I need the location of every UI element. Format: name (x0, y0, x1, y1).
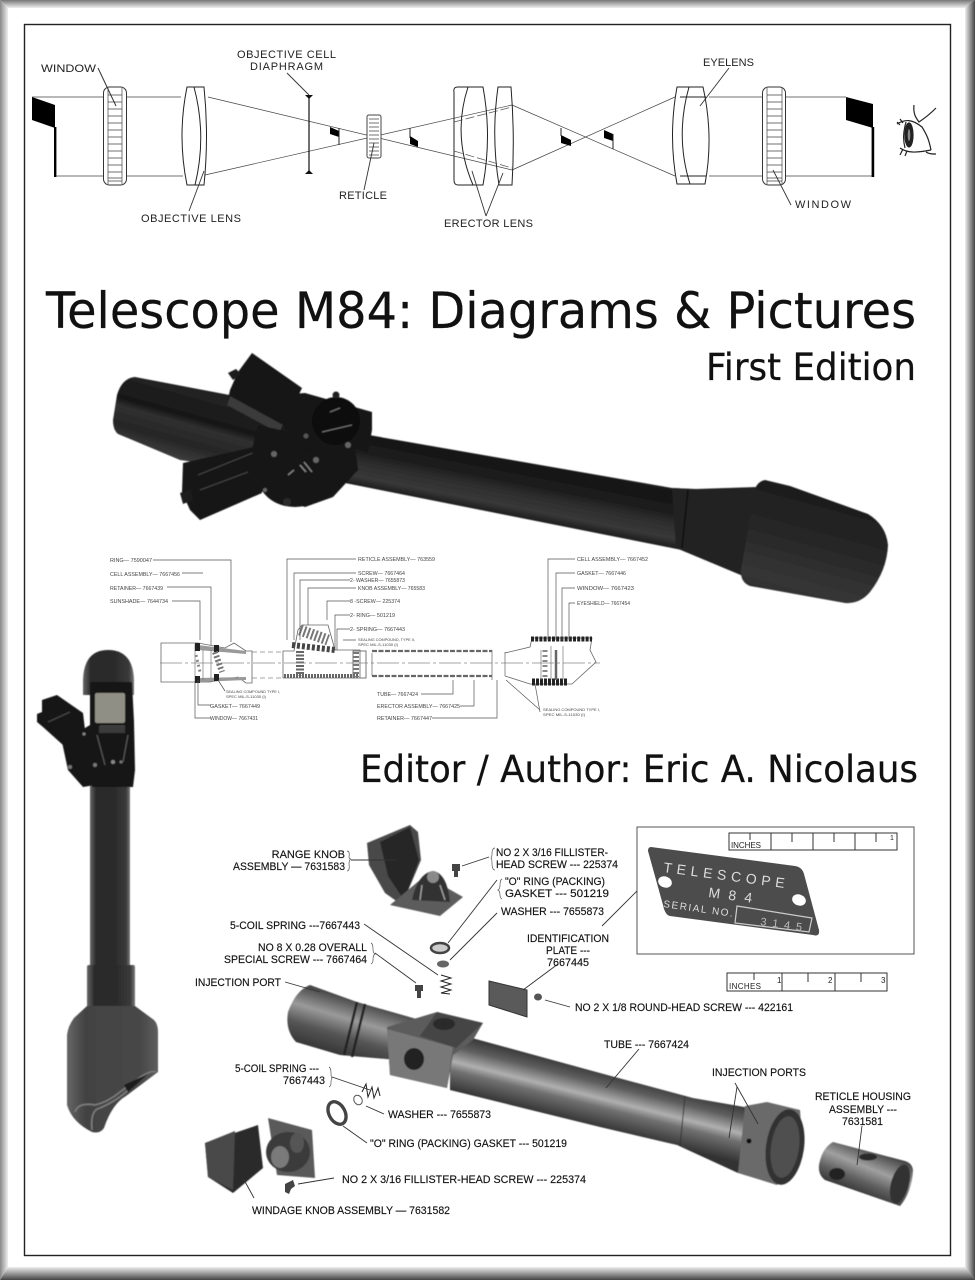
lower tube (90, 770, 130, 967)
windage knob assembly (205, 1118, 315, 1193)
part labels: SPECIAL SCREW --- 7667464 (224, 954, 367, 966)
part labels: ASSEMBLY --- (829, 1104, 897, 1116)
optical path diagram (32, 49, 936, 230)
leaders (243, 857, 862, 1198)
part labels: "O" RING (PACKING) (505, 876, 605, 888)
plate: M84 (708, 884, 754, 906)
light rays (32, 97, 874, 176)
ruler large: 3 (881, 976, 886, 985)
plate (648, 847, 819, 935)
ruler large: 1 (777, 976, 782, 985)
screw plate (534, 994, 542, 1000)
optics labels: EYELENS (703, 57, 754, 69)
callout labels: 8 -SCREW— 225374 (350, 599, 400, 605)
photo: telescope vertical (37, 650, 158, 1132)
part labels: WINDAGE KNOB ASSEMBLY — 7631582 (252, 1205, 450, 1217)
callout labels: WINDOW— 7667431 (210, 716, 258, 722)
top cover (227, 353, 302, 433)
optics labels: WINDOW (795, 199, 852, 211)
lower cover (180, 446, 262, 520)
collar groove (344, 1002, 365, 1057)
intermediate image 3 (561, 128, 571, 146)
callout labels: SEALING COMPOUND, TYPE II, (358, 638, 415, 642)
callout labels: SCREW— 7667464 (358, 571, 405, 577)
side knob (62, 725, 95, 787)
optics labels: WINDOW (41, 63, 97, 75)
part labels: PLATE --- (546, 945, 590, 957)
part labels: RANGE KNOB (272, 849, 345, 861)
callout labels: KNOB ASSEMBLY— 765583 (358, 586, 425, 592)
callout labels: SPEC MIL-S-11030 (I) (543, 713, 585, 717)
callout labels: GASKET— 7667446 (577, 571, 626, 577)
callout labels: RETICLE ASSEMBLY— 763559 (358, 557, 435, 563)
eyepiece flare (672, 487, 757, 578)
part labels: 5-COIL SPRING --- (235, 1063, 319, 1075)
part labels: 7631581 (842, 1116, 883, 1128)
eyepiece section (505, 638, 596, 684)
part labels: WASHER --- 7655873 (501, 906, 604, 918)
window right (762, 87, 786, 185)
spring upper (441, 975, 451, 994)
eyecup (67, 1006, 158, 1132)
callout labels: ERECTOR ASSEMBLY— 7667425 (377, 704, 460, 710)
optics labels (41, 49, 852, 230)
callout lines (153, 559, 575, 718)
left cover (37, 695, 85, 745)
callout labels: SEALING COMPOUND TYPE I, (543, 708, 600, 712)
callout labels: TUBE— 7667424 (377, 692, 418, 698)
part labels: NO 8 X 0.28 OVERALL (258, 942, 367, 954)
window left (104, 87, 126, 185)
body plate (252, 425, 358, 507)
callout labels: 2- WASHER— 7655873 (350, 578, 405, 584)
erector lens (454, 87, 513, 185)
part labels: RETICLE HOUSING (815, 1091, 911, 1103)
part labels: 5-COIL SPRING ---7667443 (230, 920, 360, 932)
center axis and tube walls (160, 650, 600, 680)
ruler small: 1 (890, 835, 894, 842)
special screw (415, 985, 423, 998)
photo: telescope horizontal (113, 353, 888, 603)
ruler small (729, 833, 897, 850)
callout labels: SEALING COMPOUND TYPE I, (226, 690, 280, 694)
knob details (68, 726, 128, 769)
leader lines (98, 68, 791, 216)
optics labels: DIAPHRAGM (250, 61, 323, 73)
callout labels: CELL ASSEMBLY— 7667456 (110, 572, 180, 578)
eyelens (672, 87, 709, 184)
screw lower (285, 1180, 295, 1194)
part labels: TUBE --- 7667424 (604, 1039, 689, 1051)
part labels: 7667443 (283, 1075, 325, 1087)
intermediate image 2 (410, 128, 418, 147)
part labels: INJECTION PORTS (712, 1067, 806, 1079)
callout labels: RING— 7590047 (110, 558, 152, 564)
reticle housing photo (819, 1142, 914, 1206)
callout labels: SPEC MIL-S-11030 (I) (226, 695, 266, 699)
callout labels: GASKET— 7667449 (210, 704, 260, 710)
range knob (304, 392, 360, 448)
title: Telescope M84: Diagrams & Pictures (45, 282, 916, 340)
callout labels: RETAINER— 7667439 (110, 586, 163, 592)
part labels: NO 2 X 3/16 FILLISTER-HEAD SCREW --- 225374 (342, 1174, 586, 1186)
objective housing (161, 643, 252, 683)
callout labels: SUNSHADE— 7644734 (110, 599, 168, 605)
spring lower (362, 1084, 380, 1098)
central knob housing (283, 625, 366, 678)
ruler large (727, 973, 887, 991)
part labels: HEAD SCREW --- 225374 (496, 859, 618, 871)
callout labels: WINDOW— 7667423 (577, 586, 634, 592)
objective cell diaphragm (305, 95, 313, 174)
ruler large: 2 (828, 976, 833, 985)
callout labels: 2- SPRING— 7667443 (350, 627, 405, 633)
screw upper (452, 864, 460, 877)
intermediate image 4 (604, 130, 613, 149)
part labels: "O" RING (PACKING) GASKET --- 501219 (370, 1138, 567, 1150)
washer upper (437, 960, 449, 968)
callout labels: SPEC MIL-S-11030 (I) (358, 643, 398, 647)
long tube (450, 1032, 750, 1173)
part labels: GASKET --- 501219 (505, 888, 609, 900)
icon: eye (897, 105, 936, 156)
eyecup opening (75, 1072, 156, 1130)
callout labels: RETAINER— 7667447 (377, 716, 432, 722)
optics labels: OBJECTIVE LENS (141, 213, 241, 225)
cross-section drawing (110, 557, 648, 722)
part labels (195, 847, 911, 1217)
callout labels: EYESHIELD— 7667454 (577, 601, 630, 607)
edition subtitle: First Edition (706, 346, 916, 389)
eyecup (741, 480, 888, 603)
mounting block (387, 1012, 483, 1088)
target image left (32, 97, 56, 177)
washer lower (352, 1094, 364, 1106)
objective end cylinder (113, 377, 360, 470)
author line: Editor / Author: Eric A. Nicolaus (360, 748, 918, 791)
objective lens (182, 87, 206, 185)
part labels: WASHER --- 7655873 (388, 1109, 491, 1121)
range knob assembly (367, 825, 463, 916)
image at eye side (846, 97, 874, 177)
ruler small: INCHES (731, 841, 761, 850)
plate: TELESCOPE (663, 859, 786, 891)
part labels: IDENTIFICATION (527, 933, 609, 945)
windage knob (258, 447, 332, 507)
part labels: INJECTION PORT (195, 977, 281, 989)
o-ring lower (324, 1099, 350, 1127)
plate: 3145 (760, 916, 803, 934)
nameplate panel (637, 827, 914, 954)
part labels: 7667445 (547, 957, 589, 969)
o-ring upper (431, 943, 449, 953)
tube step line (680, 1096, 685, 1146)
callout labels (110, 557, 648, 722)
identification plate part (489, 981, 527, 1017)
main tube (340, 430, 755, 578)
window cover and knob block (90, 682, 135, 787)
reticle (367, 115, 381, 158)
callout labels: 2- RING— 501219 (350, 613, 395, 619)
braces (329, 848, 502, 1087)
dome end (83, 650, 134, 695)
ruler large: INCHES (729, 982, 761, 991)
part labels: NO 2 X 1/8 ROUND-HEAD SCREW --- 422161 (575, 1002, 793, 1014)
tube assembly photo (287, 985, 809, 1187)
callout labels: CELL ASSEMBLY— 7667452 (577, 557, 648, 563)
intermediate image 1 (330, 127, 339, 145)
optics labels: ERECTOR LENS (444, 218, 533, 230)
threaded collar (738, 1102, 803, 1185)
plate: SERIAL NO. (663, 899, 733, 920)
part labels: NO 2 X 3/16 FILLISTER- (496, 847, 608, 859)
front cylinder (287, 985, 420, 1062)
window pane (95, 693, 125, 723)
eyepiece collar (87, 965, 135, 1007)
optics labels: OBJECTIVE CELL (237, 49, 336, 61)
exploded view (195, 825, 914, 1217)
optics labels: RETICLE (339, 190, 387, 202)
part labels: ASSEMBLY — 7631583 (233, 861, 345, 873)
